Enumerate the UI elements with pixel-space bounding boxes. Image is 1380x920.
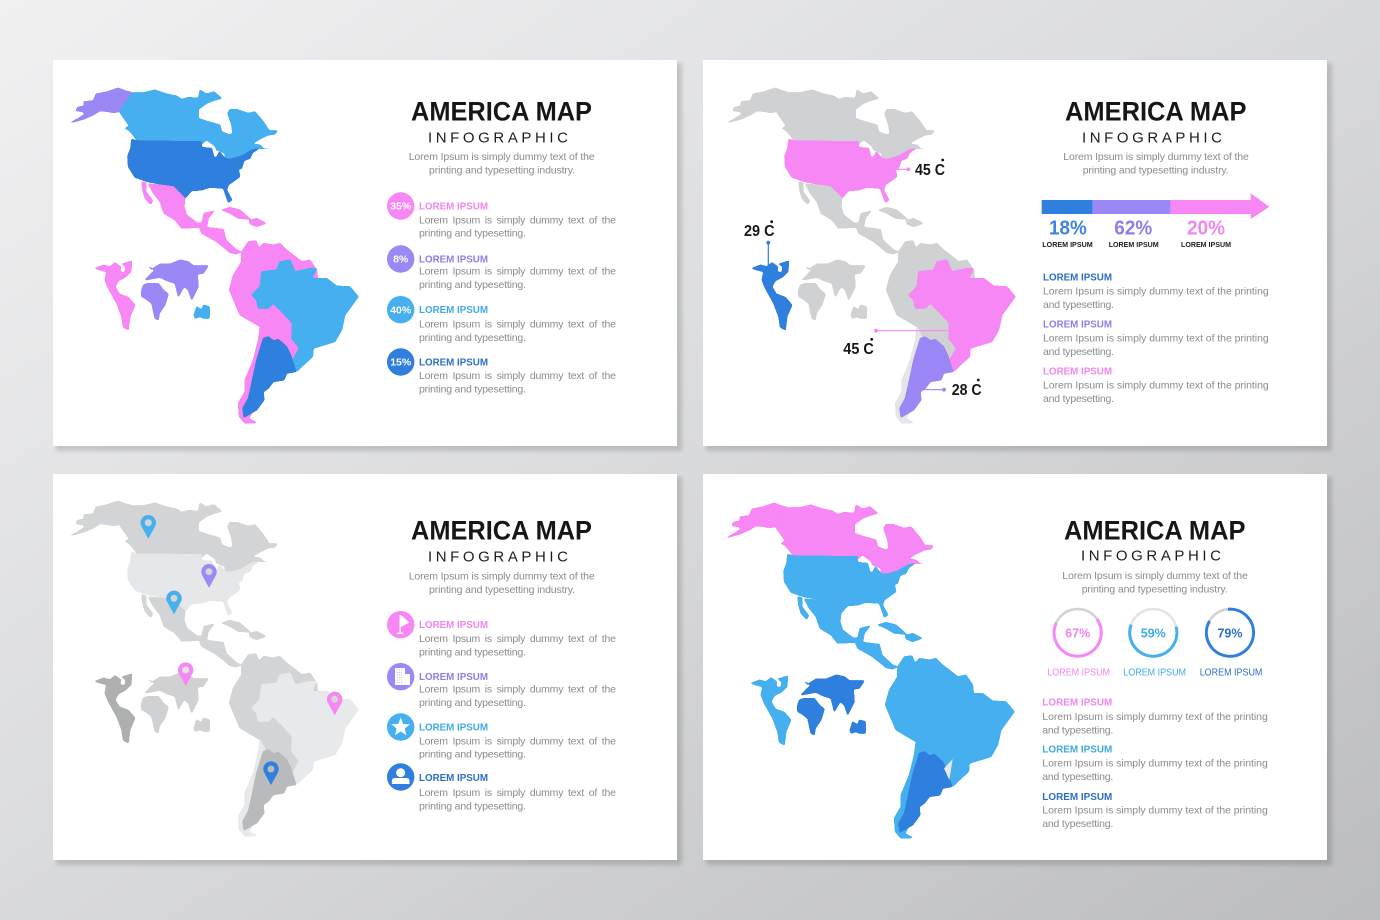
text block: purple: and typesetting. (1043, 346, 1114, 358)
item: 35%: 35% (390, 201, 412, 213)
callout: 28 C (923, 379, 982, 399)
text block: light blue: LOREM IPSUM (1042, 744, 1113, 756)
intro text (409, 151, 595, 176)
callout: 45 C north: 45 C (915, 162, 945, 179)
item: 35%: printing and typesetting. (419, 228, 526, 240)
text block: pink: and typesetting. (1042, 724, 1113, 736)
donut: 79%: LOREM IPSUM (1200, 667, 1262, 678)
map: temperature regions (728, 88, 1015, 423)
donut: 67%: LOREM IPSUM (1047, 667, 1110, 678)
stat: 62%: LOREM IPSUM (1109, 240, 1159, 249)
intro text: Lorem Ipsum is simply dummy text of the (1063, 151, 1249, 163)
text block: blue: and typesetting. (1043, 299, 1114, 311)
intro text: printing and typesetting industry. (1082, 583, 1228, 595)
item: 8% (387, 245, 616, 291)
text block: pink: Lorem Ipsum is simply dummy text of the printing (1042, 711, 1268, 723)
panel: temperature map (703, 60, 1332, 451)
text block: purple (1043, 318, 1269, 358)
item: 15%: Lorem Ipsum is simply dummy text of the (419, 370, 616, 382)
item: 8%: printing and typesetting. (419, 279, 526, 291)
item: 40%: printing and typesetting. (419, 332, 526, 344)
item: flag: printing and typesetting. (419, 646, 526, 658)
panel: pin map (53, 474, 682, 865)
donut: 79%: 79% (1217, 627, 1243, 641)
stat: 20%: 20% (1187, 216, 1225, 239)
text block: pink: Lorem Ipsum is simply dummy text of the printing (1043, 380, 1269, 392)
text block: pink (1043, 365, 1269, 405)
item: person (387, 763, 616, 812)
text block: dark blue (1042, 791, 1268, 830)
donut: 59% (1123, 609, 1186, 678)
item: star: Lorem Ipsum is simply dummy text of the (419, 735, 616, 747)
text block: purple: Lorem Ipsum is simply dummy text of the printing (1043, 333, 1269, 345)
item: 35%: LOREM IPSUM (419, 200, 488, 212)
donut: 67%: 67% (1065, 627, 1090, 641)
stat: 18% (1042, 216, 1093, 249)
intro text: Lorem Ipsum is simply dummy text of the (1062, 570, 1248, 582)
callout: 45 C south (843, 329, 950, 358)
intro text: printing and typesetting industry. (429, 164, 575, 176)
title: AMERICA MAP (1065, 97, 1246, 127)
text block: purple: LOREM IPSUM (1043, 318, 1112, 330)
text block: pink: and typesetting. (1043, 393, 1114, 405)
title: AMERICA MAP (1064, 516, 1246, 546)
intro text: Lorem Ipsum is simply dummy text of the (409, 570, 595, 582)
item: 40%: Lorem Ipsum is simply dummy text of the (419, 319, 616, 331)
text block: pink: LOREM IPSUM (1042, 696, 1113, 708)
item: 15% (387, 348, 616, 395)
donut: 79% (1200, 609, 1262, 678)
map: blue and pink regions (727, 503, 1014, 838)
item: person: LOREM IPSUM (419, 772, 488, 784)
subtitle: INFOGRAPHIC (1081, 547, 1221, 564)
item: building: LOREM IPSUM (419, 671, 488, 683)
title: AMERICA MAP (411, 516, 592, 546)
intro text: printing and typesetting industry. (429, 584, 575, 596)
callout: 45 C north (896, 159, 945, 179)
callout: 29 C: 29 C (744, 223, 774, 240)
item: building: printing and typesetting. (419, 697, 526, 709)
item: 15%: 15% (390, 357, 412, 369)
item: 40% (387, 296, 616, 344)
item: person: Lorem Ipsum is simply dummy text of the (419, 787, 616, 799)
text block: blue: Lorem Ipsum is simply dummy text of the printing (1043, 286, 1269, 298)
map: coloured regions (71, 88, 358, 423)
item: 15%: LOREM IPSUM (419, 356, 488, 368)
item: 40%: 40% (390, 304, 412, 316)
subtitle: INFOGRAPHIC (428, 129, 568, 146)
text block: dark blue: and typesetting. (1042, 818, 1113, 830)
text block: dark blue: Lorem Ipsum is simply dummy text of the printing (1042, 805, 1268, 817)
item: flag (387, 611, 616, 658)
item: flag: Lorem Ipsum is simply dummy text of the (419, 633, 616, 645)
item: building (387, 663, 616, 709)
text block: light blue (1042, 744, 1268, 783)
stat: 62%: 62% (1114, 216, 1152, 239)
item: 8%: LOREM IPSUM (419, 253, 488, 265)
item: 15%: printing and typesetting. (419, 383, 526, 395)
intro text: Lorem Ipsum is simply dummy text of the (409, 151, 595, 163)
panel: regions share map (53, 60, 682, 451)
callout: 29 C (744, 220, 774, 266)
item: person: printing and typesetting. (419, 800, 526, 812)
panel: donut stats map (703, 474, 1332, 865)
map: grey regions (71, 501, 358, 836)
stat: 20%: LOREM IPSUM (1181, 240, 1231, 249)
intro text (409, 570, 595, 596)
item: 35%: Lorem Ipsum is simply dummy text of the (419, 214, 616, 226)
item: star (387, 713, 616, 761)
item: 40%: LOREM IPSUM (419, 304, 488, 316)
text block: pink: LOREM IPSUM (1043, 365, 1112, 377)
map pins (141, 515, 342, 785)
callout: 45 C south: 45 C (843, 341, 874, 358)
donut: 67% (1047, 609, 1110, 678)
subtitle: INFOGRAPHIC (428, 548, 568, 565)
item: star: printing and typesetting. (419, 749, 526, 761)
arrow bar (1042, 193, 1269, 219)
item: star: LOREM IPSUM (419, 721, 488, 733)
text block: blue: LOREM IPSUM (1043, 271, 1112, 283)
item: 8%: Lorem Ipsum is simply dummy text of the (419, 266, 616, 278)
intro text (1062, 570, 1248, 595)
subtitle: INFOGRAPHIC (1082, 129, 1222, 146)
stat: 62% (1109, 216, 1159, 249)
callout: 28 C: 28 C (952, 382, 982, 399)
intro text (1063, 151, 1249, 176)
text block: pink (1042, 696, 1268, 736)
item: 35% (387, 192, 616, 240)
stat: 18%: LOREM IPSUM (1042, 240, 1093, 249)
title: AMERICA MAP (411, 97, 592, 127)
donut: 59%: LOREM IPSUM (1123, 667, 1186, 678)
text block: light blue: and typesetting. (1042, 771, 1113, 783)
stat: 18%: 18% (1049, 216, 1087, 239)
item: flag: LOREM IPSUM (419, 619, 488, 631)
item: 8%: 8% (393, 254, 409, 266)
item: building: Lorem Ipsum is simply dummy text of the (419, 684, 616, 696)
text block: light blue: Lorem Ipsum is simply dummy text of the printing (1042, 758, 1268, 770)
donut: 59%: 59% (1141, 627, 1166, 641)
text block: dark blue: LOREM IPSUM (1042, 791, 1113, 803)
text block: blue (1043, 271, 1269, 311)
stat: 20% (1181, 216, 1231, 249)
intro text: printing and typesetting industry. (1083, 164, 1229, 176)
